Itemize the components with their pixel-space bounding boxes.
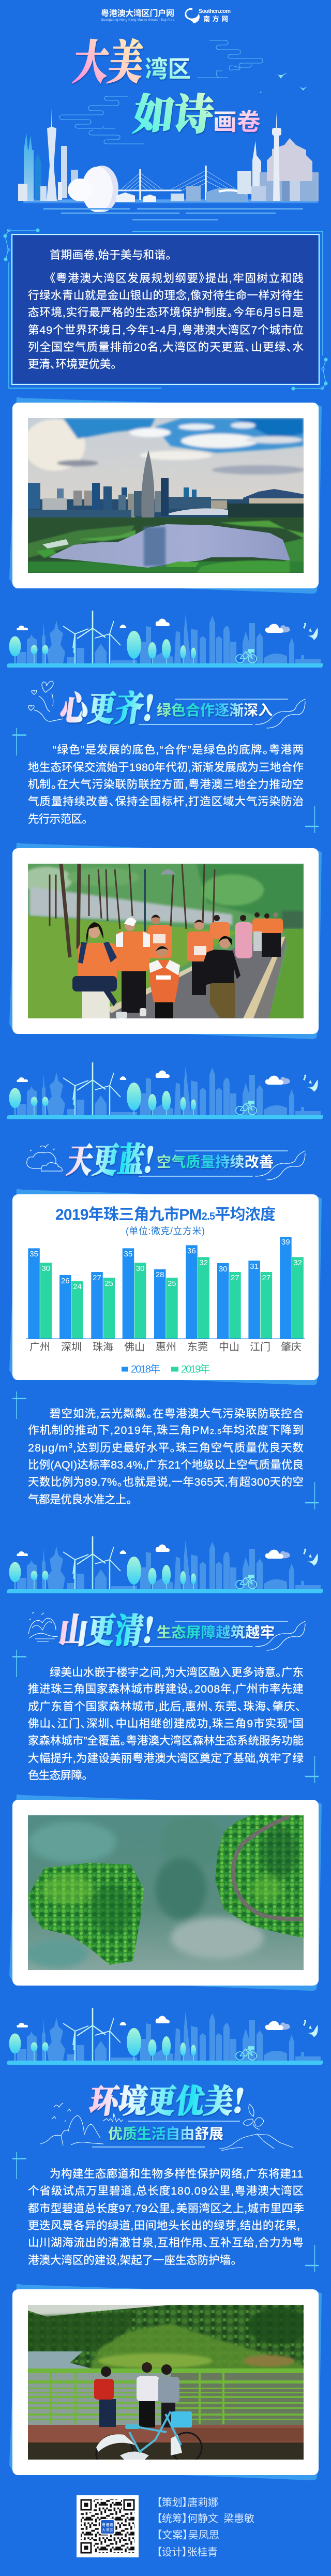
cross decoration: [12, 728, 26, 756]
text block: green cooperation: [28, 744, 304, 825]
Hong Kong buildings: [237, 141, 319, 201]
title: 大美湾区 如诗画卷: 如诗: [130, 80, 218, 142]
runner: boy in black: [201, 936, 240, 1018]
Ruins of St. Paul's: [267, 138, 312, 181]
text block: greenway: [28, 2168, 304, 2267]
photo card: runners on a green path: [9, 843, 322, 1039]
value labels: 27: [231, 1274, 239, 1282]
text block: green cooperation: 先行示范区。: [28, 813, 87, 825]
icon: hearts: [28, 681, 63, 721]
city labels: 深圳: [61, 1341, 82, 1353]
icon: mountains, birds, grass and flower: [40, 2103, 293, 2151]
cross decoration: [305, 1756, 319, 1783]
opera house: [68, 166, 118, 212]
text block: greenway: 个省级试点万里碧道,总长度180.09公里,粤港澳大湾区: [28, 2185, 304, 2197]
header logo: 粤港澳大湾区门户网: 粤港澳大湾区门户网: [101, 8, 174, 18]
icon: mountains and birds: [28, 1612, 58, 1641]
text block: air quality: 气都是优良水准之上。: [28, 1493, 132, 1506]
QR centre logo: [100, 2519, 115, 2535]
header logo: 南方网: Southcn.com: [199, 8, 231, 14]
cross decoration: [12, 1650, 26, 1677]
text block: air quality: 28μg/m: [28, 1442, 68, 1454]
section heading: 天更蓝! 空气质量持续改善: 天更蓝!: [64, 1133, 158, 1182]
legend: [122, 1363, 210, 1375]
text block: forest city: [28, 1666, 304, 1782]
cross decoration: [305, 806, 319, 833]
skyline divider 1: [7, 611, 323, 668]
value labels: 31: [250, 1262, 259, 1271]
text block: green cooperation: “绿色”是发展的底色,“合作”是绿色的底牌。粤港两: [53, 744, 304, 756]
section heading: 环境更优美! 优质生活自由舒展: [40, 2075, 293, 2151]
cross decoration: [12, 2152, 26, 2179]
text block: green cooperation: 气质量持续改善、保持全国标杆,打造区域大气污染防治: [28, 795, 304, 808]
intro text: 第49个世界环境日,今年1-4月,粤港澳大湾区7个城市位: [28, 324, 304, 336]
section heading: 环境更优美! 优质生活自由舒展: 环境更优美!: [87, 2075, 248, 2122]
QR centre logo: 大湾区: [102, 2527, 113, 2533]
intro text: [28, 249, 304, 371]
bicycle: [95, 2411, 203, 2460]
text block: greenway: 港澳大湾区的建设,架起了一座生态防护墙。: [28, 2254, 236, 2267]
section heading: 心更齐! 绿色合作逐渐深入: 绿色合作逐渐深入: [157, 702, 273, 718]
intro text: 《粤港澳大湾区发展规划纲要》提出,牢固树立和践: [50, 272, 304, 285]
value labels: [29, 1238, 302, 1291]
city labels: 东莞: [187, 1341, 208, 1353]
text block: forest city: 推进珠三角国家森林城市群建设。2008年,广州市率先建: [28, 1683, 304, 1695]
intro text: 态环境,实行最严格的生态环境保护制度。今年6月5日是: [28, 306, 304, 319]
Canton Tower: [47, 108, 57, 201]
text block: air quality: 比例(AQI)达标率83.4%,广东21个地级以上空气质量优良: [28, 1459, 304, 1471]
chart title: 2019年珠三角九市PM2.5平均浓度: [55, 1206, 276, 1223]
city labels: 中山: [219, 1341, 239, 1353]
section heading: 天更蓝! 空气质量持续改善: [27, 1133, 305, 1182]
value labels: 35: [29, 1250, 38, 1259]
section heading: 心更齐! 绿色合作逐渐深入: [28, 681, 305, 730]
value labels: 30: [41, 1264, 50, 1273]
intro text: 行绿水青山就是金山银山的理念,像对待生命一样对待生: [28, 289, 304, 302]
credits: 【设计】张桂青: [157, 2546, 218, 2558]
title: 大美湾区 如诗画卷: 湾区: [145, 56, 191, 82]
text block: forest city: 绿美山水嵌于楼宇之间,为大湾区融入更多诗意。广东: [50, 1666, 304, 1679]
section heading: 山更清! 生态屏障越筑越牢: 生态屏障越筑越牢: [157, 1624, 275, 1640]
circuit decoration top-left: [4, 229, 39, 261]
cloud scroll lines upper: [197, 40, 263, 78]
city labels: 惠州: [156, 1341, 176, 1353]
credits: [157, 2496, 254, 2558]
text block: forest city: 色生态屏障。: [28, 1769, 87, 1782]
text block: air quality: 作机制的推动下,2019年,珠三角PM2.5年均浓度下降到: [28, 1424, 304, 1437]
text block: air quality: ,达到历史最好水平。珠三角空气质量优良天数: [73, 1442, 304, 1454]
legend: 2018年: [131, 1363, 160, 1375]
text block: greenway: 山川湖海流出的清澈甘泉,互相作用、互补互给,合力为粤: [28, 2237, 304, 2249]
chart card: PM2.5 bar chart: [9, 1189, 322, 1385]
text block: greenway: 更迭风景各异的绿道,田间地头长出的绿芽,结出的花果,: [28, 2219, 300, 2232]
child in red: [94, 2366, 116, 2427]
credits: 【统筹】何静文 梁惠敏: [157, 2513, 254, 2524]
text block: forest city: 大幅提升,为建设美丽粤港澳大湾区奠定了基础,筑牢了绿: [28, 1752, 304, 1765]
birds: [258, 73, 307, 93]
intro text: 首期画卷,始于美与和谐。: [50, 249, 171, 261]
text block: forest city: 家森林城市”全覆盖。粤港澳大湾区森林生态系统服务功能: [28, 1735, 304, 1747]
text block: green cooperation: 机制。在大气污染联防联控方面,粤港澳三地全力推动空: [28, 778, 304, 791]
cloud scroll lines lower: [59, 96, 144, 144]
header skyline illustration: [18, 108, 319, 212]
child in grey: [158, 2364, 179, 2427]
child in white: [137, 2362, 159, 2427]
section heading: 山更清! 生态屏障越筑越牢: [28, 1603, 305, 1652]
header small print bars: [43, 208, 303, 220]
value labels: 39: [281, 1238, 290, 1247]
city labels: 珠海: [93, 1341, 113, 1353]
text block: greenway: 都市型碧道总长度97.79公里。美丽湾区之上,城市里四季: [28, 2202, 304, 2215]
text block: air quality: 3: [68, 1441, 72, 1449]
bridges: [118, 166, 236, 200]
credits: 【文案】吴凤思: [157, 2529, 219, 2541]
cross decoration: [305, 1482, 319, 1509]
section heading: 天更蓝! 空气质量持续改善: 空气质量持续改善: [157, 1154, 274, 1170]
skyline divider 4: [7, 2008, 323, 2065]
circuit decoration bottom-right: [292, 358, 327, 390]
cross decoration: [12, 1391, 26, 1419]
text block: air quality: 碧空如洗,云光粼粼。在粤港澳大气污染联防联控合: [50, 1408, 304, 1420]
axis: [26, 1338, 305, 1339]
text block: air quality: [28, 1408, 304, 1506]
value labels: 36: [187, 1247, 196, 1255]
left towers: [18, 133, 78, 201]
intro text: 更清、环境更优美。: [28, 358, 116, 371]
bars 2019: [40, 1257, 304, 1339]
text block: greenway: 为构建生态廊道和生物多样性保护网络,广东将建11: [50, 2168, 303, 2180]
runner: woman in white cap: [116, 917, 150, 1018]
skyline divider 2: [7, 1062, 323, 1119]
value labels: 30: [219, 1265, 228, 1274]
title: 大美湾区 如诗画卷: 画卷: [213, 109, 261, 135]
title: 大美湾区 如诗画卷: [70, 25, 261, 142]
far runners: [210, 912, 283, 958]
photo card: forested islands from above: [9, 1795, 322, 1991]
runner: man behind: [148, 915, 172, 958]
value labels: 32: [293, 1259, 302, 1267]
waterfront buildings: [116, 186, 248, 202]
value labels: 28: [156, 1270, 164, 1279]
city labels: 肇庆: [281, 1341, 302, 1353]
panel: introduction: [4, 229, 327, 390]
value labels: 24: [73, 1282, 82, 1291]
city labels: 江门: [250, 1341, 270, 1353]
value labels: 25: [168, 1279, 176, 1288]
photo card: children and bicycle at the lake: [9, 2284, 322, 2480]
text block: green cooperation: 地生态环保交流始于1980年代初,渐渐发展成为三地合作: [28, 761, 304, 774]
credits: 【策划】唐莉娜: [157, 2496, 218, 2509]
value labels: 35: [124, 1250, 132, 1259]
city labels: 广州: [29, 1341, 50, 1353]
runner: woman right: [187, 920, 213, 995]
chart unit: (单位:微克/立方米): [126, 1226, 205, 1236]
Macau Tower: [272, 112, 281, 201]
city labels: [29, 1341, 302, 1353]
text block: forest city: 佛山、江门、深圳、中山相继创建成功,珠三角9市实现“国: [28, 1718, 304, 1730]
title: 大美湾区 如诗画卷: 大美: [70, 25, 148, 92]
text block: forest city: 成广东首个国家森林城市,此后,惠州、东莞、珠海、肇庆、: [28, 1700, 301, 1713]
section heading: 环境更优美! 优质生活自由舒展: 优质生活自由舒展: [108, 2126, 223, 2142]
section heading: 山更清! 生态屏障越筑越牢: 山更清!: [56, 1603, 158, 1652]
bars 2018: [28, 1237, 292, 1339]
header logo: 粤港澳大湾区门户网: [101, 8, 175, 22]
finder patterns: [81, 2499, 134, 2553]
value labels: 26: [61, 1277, 70, 1285]
city labels: 佛山: [124, 1341, 145, 1353]
value labels: 27: [262, 1274, 270, 1282]
cross decoration: [305, 2245, 319, 2272]
QR centre logo: 粤港澳: [102, 2522, 113, 2527]
header logo: 南方网: [185, 8, 231, 23]
text block: air quality: 天数比例为89.7%。也就是说,一年365天,有超300天的空: [28, 1476, 304, 1488]
intro text: 列全国空气质量排前20名,大湾区的天更蓝、山更绿、水: [28, 341, 304, 353]
legend: 2019年: [181, 1363, 210, 1375]
skyline divider 3: [7, 1536, 323, 1593]
section heading: 心更齐! 绿色合作逐渐深入: 心更齐!: [57, 681, 158, 730]
icon: clouds and birds: [27, 1145, 62, 1171]
header logo: 粤港澳大湾区门户网: Guangdong-Hong Kong-Macao Greater Bay Area: [101, 19, 175, 22]
photo card: Shenzhen skyline and lake: [9, 397, 322, 594]
runner: boy in orange: [149, 945, 180, 1018]
QR code: [77, 2495, 139, 2557]
value labels: 30: [136, 1264, 144, 1273]
rules: [92, 2121, 240, 2147]
value labels: 25: [104, 1279, 113, 1288]
value labels: 32: [199, 1259, 208, 1267]
value labels: 27: [93, 1274, 101, 1282]
header logo: 南方网: 南方网: [203, 15, 228, 23]
runner: woman front: [72, 922, 117, 1018]
